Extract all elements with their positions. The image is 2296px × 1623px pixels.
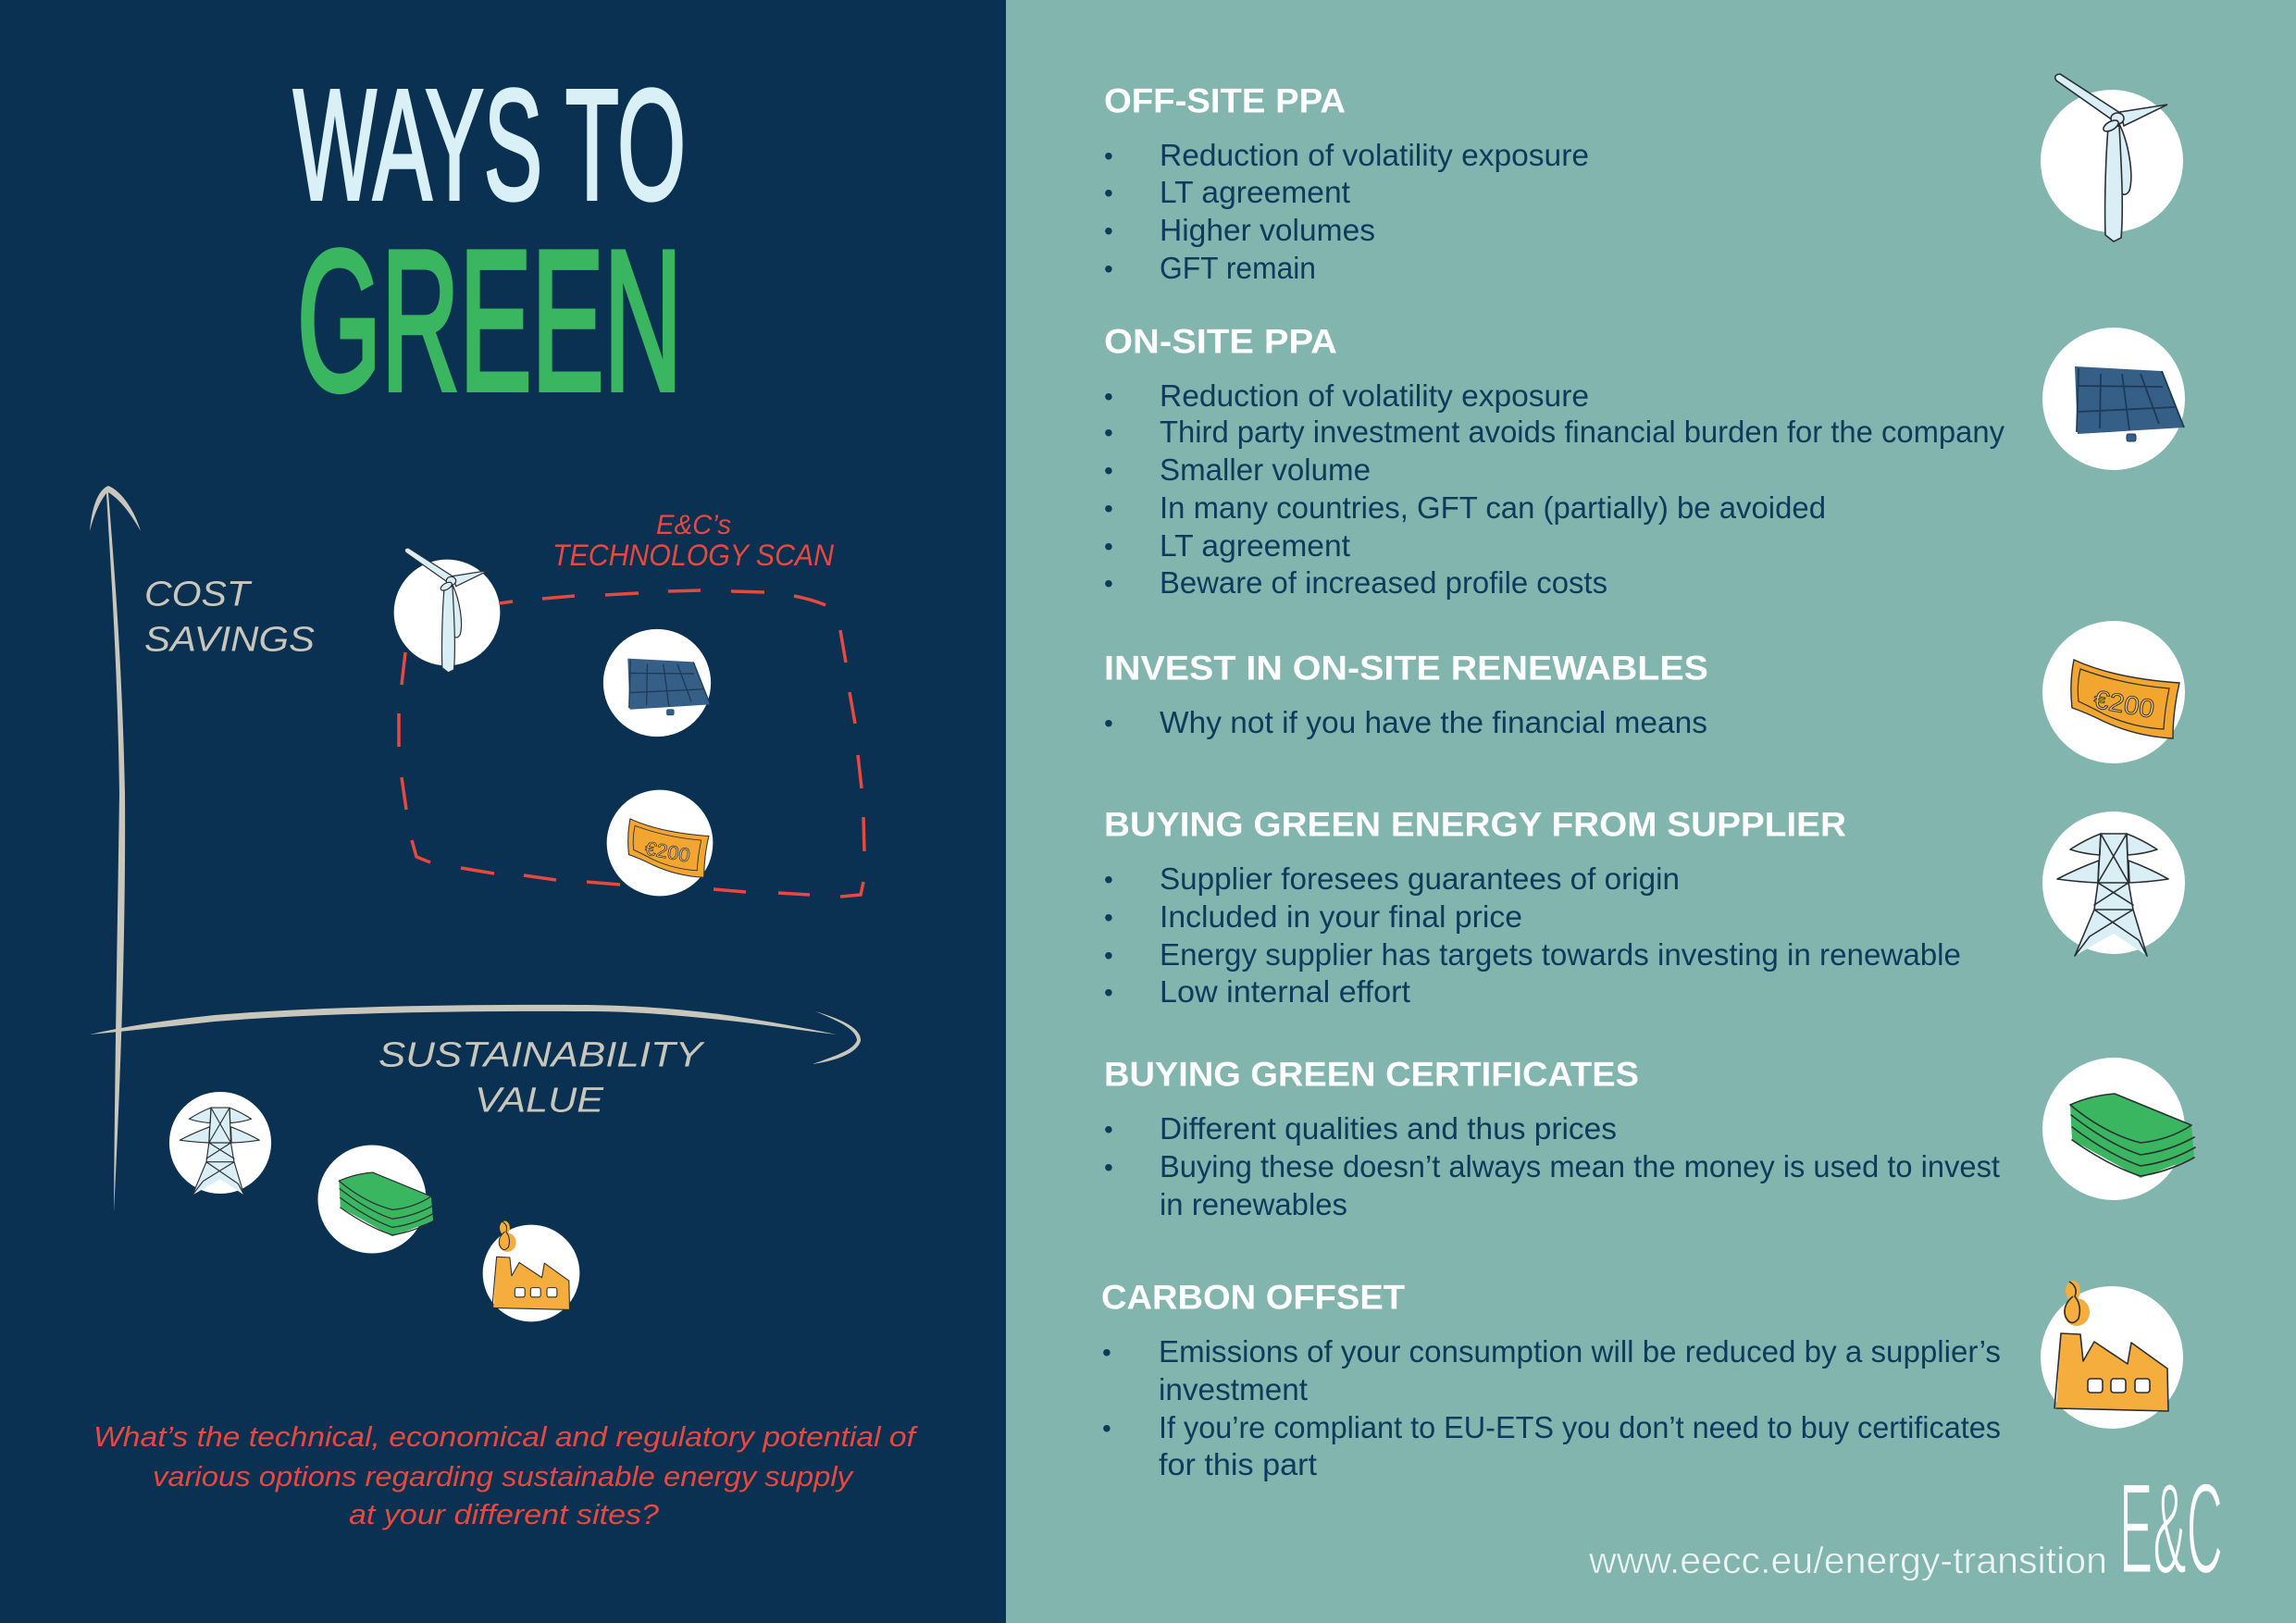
bullet list: • (1104, 569, 1113, 598)
heading: BUYING GREEN CERTIFICATES (1104, 1055, 1639, 1094)
label: cost savings: SAVINGS (144, 620, 315, 659)
icon: factory (2041, 1281, 2183, 1429)
bullet list: Third party investment avoids financial burden for the company (1160, 415, 2004, 449)
bullet list: • (1104, 179, 1113, 207)
bullet list: • (1102, 1414, 1111, 1443)
bullet list (1104, 861, 1961, 1009)
label: cost savings (144, 576, 315, 659)
bullet list: LT agreement (1160, 528, 1350, 563)
chart: cost savings vs sustainability value (90, 486, 864, 1321)
bullet list: Reduction of volatility exposure (1160, 378, 1589, 413)
label: technology scan: TECHNOLOGY SCAN (552, 539, 835, 572)
bullet list: Why not if you have the financial means (1160, 705, 1707, 739)
arrow: horizontal axis (90, 1005, 861, 1064)
heading: OFF-SITE PPA (1104, 81, 1346, 120)
bullet list: • (1104, 494, 1113, 523)
bullet list: Low internal effort (1160, 974, 1410, 1009)
bullet list (1102, 1334, 2001, 1481)
bullet list: in renewables (1160, 1187, 1347, 1221)
section: carbon offset (1101, 1279, 2183, 1481)
label: technology scan: E&C’s (656, 510, 731, 540)
bullet list (1104, 1111, 2000, 1221)
bullet list: • (1104, 865, 1113, 894)
bullet list: • (1104, 978, 1113, 1007)
bullet list: • (1104, 709, 1113, 737)
bullet list: Emissions of your consumption will be reduced by a supplier’s (1159, 1334, 2001, 1369)
bullet list: • (1104, 142, 1113, 170)
icon: wind turbine (2041, 74, 2183, 242)
icon: wind turbine (394, 548, 500, 673)
bullet list: for this part (1159, 1447, 1317, 1481)
icon: green certificates (2042, 1058, 2195, 1200)
bullet list: Different qualities and thus prices (1160, 1111, 1617, 1146)
bullet list: LT agreement (1160, 175, 1350, 209)
bullet list: Included in your final price (1160, 899, 1522, 934)
heading: CARBON OFFSET (1101, 1279, 1405, 1316)
bullet list (1104, 138, 1589, 285)
bullet list: If you’re compliant to EU-ETS you don’t need to buy certificates (1159, 1410, 2001, 1444)
bullet list: • (1104, 254, 1113, 283)
label: sustainability value: SUSTAINABILITY (379, 1036, 705, 1075)
bullet list: Higher volumes (1160, 213, 1375, 247)
bullet list: Smaller volume (1160, 452, 1371, 487)
bullet list: • (1104, 941, 1113, 970)
question text (93, 1420, 919, 1530)
section: buying green certificates (1104, 1055, 2195, 1221)
bullet list: • (1104, 382, 1113, 411)
website url: www.eecc.eu/energy-transition (1588, 1541, 2107, 1581)
bullet list: Buying these doesn’t always mean the money is used to invest (1160, 1149, 2000, 1183)
section: buying green energy from supplier (1104, 805, 2185, 1009)
icon: pylon (169, 1092, 271, 1195)
question text: at your different sites? (349, 1498, 660, 1530)
icon: banknote (2042, 621, 2185, 763)
bullet list (1104, 378, 2004, 600)
bullet list: Reduction of volatility exposure (1160, 138, 1589, 172)
bullet list: • (1104, 418, 1113, 447)
bullet list: • (1104, 1115, 1113, 1144)
label: technology scan (552, 510, 835, 572)
icon: pylon (2042, 812, 2185, 956)
bullet list: • (1104, 903, 1113, 932)
panel: right teal panel (1006, 0, 2296, 1623)
bullet list: • (1104, 532, 1113, 561)
title (293, 57, 686, 432)
question text: various options regarding sustainable energy supply (153, 1460, 855, 1493)
label: cost savings: COST (144, 576, 253, 614)
label: sustainability value: VALUE (475, 1081, 604, 1120)
title: WAYS TO (293, 57, 686, 233)
bullet list: In many countries, GFT can (partially) be avoided (1160, 490, 1826, 525)
bullet list: Energy supplier has targets towards investing in renewable (1160, 937, 1961, 972)
section: on-site ppa (1104, 322, 2185, 600)
question text: What’s the technical, economical and regulatory potential of (93, 1420, 919, 1453)
bullet list: Supplier foresees guarantees of origin (1160, 861, 1680, 896)
icon: banknote (607, 790, 713, 896)
section: off-site ppa (1104, 74, 2183, 285)
heading: ON-SITE PPA (1104, 322, 1337, 361)
title: GREEN (297, 208, 682, 432)
section: invest in on-site renewables (1104, 621, 2185, 763)
arrow: vertical axis (90, 486, 141, 1212)
icon: solar panel (2042, 328, 2185, 470)
bullet list: • (1102, 1338, 1111, 1367)
panel: left dark panel (0, 0, 1006, 1623)
label: sustainability value (379, 1036, 705, 1120)
bullet list: • (1104, 217, 1113, 245)
bullet list: investment (1159, 1372, 1308, 1406)
heading: INVEST IN ON-SITE RENEWABLES (1104, 650, 1708, 687)
bullet list: • (1104, 1153, 1113, 1182)
icon: solar panel (603, 629, 711, 737)
bullet list: Beware of increased profile costs (1160, 565, 1607, 600)
icon: factory (483, 1221, 579, 1321)
dashed box: technology scan (399, 590, 864, 897)
icon: green certificates (317, 1145, 434, 1254)
bullet list: GFT remain (1160, 251, 1316, 285)
bullet list: • (1104, 456, 1113, 485)
heading: BUYING GREEN ENERGY FROM SUPPLIER (1104, 805, 1846, 844)
